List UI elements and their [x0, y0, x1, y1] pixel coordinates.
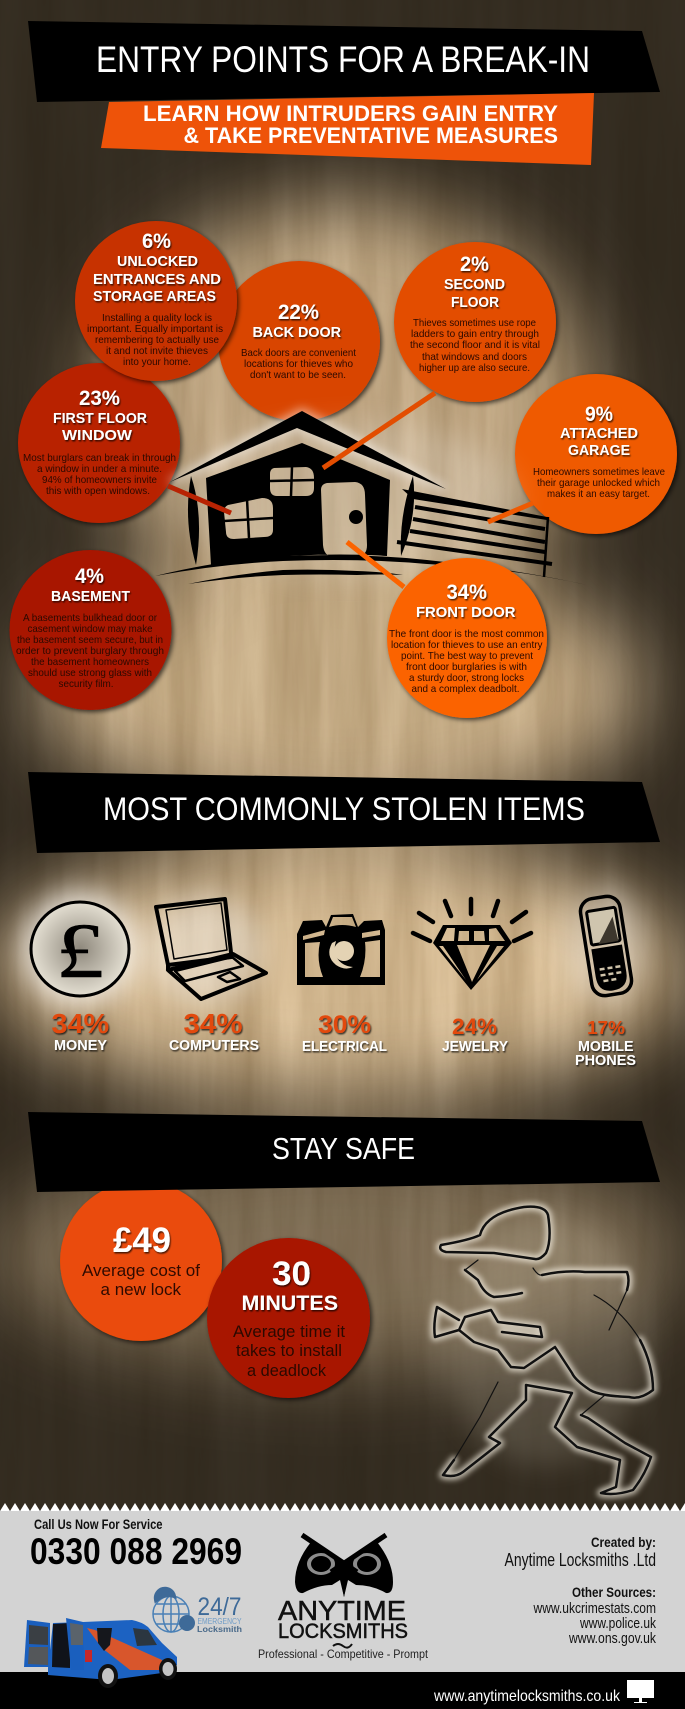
stat: electrical: 30% [318, 1011, 371, 1039]
section banner: most commonly stolen items [28, 772, 660, 853]
logo: 24/7 emergency locksmith: EMERGENCY [198, 1616, 242, 1626]
callout: attached garage: makes it an easy target. [547, 488, 650, 500]
callout: unlocked entrances and storage areas [75, 221, 237, 381]
callout: average lock cost [60, 1181, 222, 1341]
callout: unlocked entrances and storage areas: ENTRANCES AND [93, 271, 221, 288]
logo: anytime locksmiths [258, 1535, 429, 1661]
callout: basement [10, 550, 172, 710]
callout: second floor: SECOND [444, 276, 505, 293]
callout: unlocked entrances and storage areas: remembering to actually use [95, 334, 219, 346]
credits text: www.police.uk [579, 1615, 656, 1632]
callout: front door: location for thieves to use an entry [391, 639, 543, 651]
icon: pound coin: £ [56, 907, 104, 994]
callout: attached garage: Homeowners sometimes leave [533, 466, 665, 478]
stat: jewelry [442, 1014, 508, 1055]
stat: electrical: ELECTRICAL [302, 1039, 387, 1055]
callout: basement: the basement seem secure, but in [17, 634, 163, 646]
callout: deadlock install time [207, 1238, 370, 1398]
callout: second floor: 2% [460, 253, 489, 276]
callout: first floor window: Most burglars can break in through [23, 452, 176, 464]
callout: basement: security film. [58, 678, 114, 690]
callout: first floor window: 23% [79, 387, 120, 410]
callout: front door: 34% [446, 581, 487, 604]
section banner: stay safe: STAY SAFE [272, 1131, 415, 1166]
callout: attached garage: 9% [585, 403, 613, 426]
illustration: service van [24, 1618, 177, 1688]
stat: money: MONEY [54, 1038, 107, 1054]
call to action: phone number: 0330 088 2969 [30, 1531, 242, 1572]
callout: deadlock install time: Average time it [233, 1322, 345, 1341]
credits text: www.ukcrimestats.com [533, 1600, 656, 1617]
credits text: Created by: [591, 1534, 656, 1550]
callout: front door: a sturdy door, strong locks [409, 672, 524, 684]
stat: mobile phones: MOBILE [578, 1039, 634, 1055]
footer panel [0, 1503, 685, 1709]
callout: attached garage [515, 374, 677, 534]
callout: second floor: FLOOR [451, 294, 499, 311]
logo: 24/7 emergency locksmith [153, 1589, 242, 1634]
callout: back door: locations for thieves who [244, 358, 353, 370]
callout: front door: point. The best way to prevent [401, 650, 533, 662]
subtitle banner: & TAKE PREVENTATIVE MEASURES [184, 123, 558, 148]
callout: back door: don't want to be seen. [250, 369, 346, 381]
stat: mobile phones: PHONES [575, 1053, 636, 1069]
stat: computers [169, 1008, 259, 1054]
call to action: phone number [30, 1516, 242, 1572]
logo: anytime locksmiths: ANYTIME [278, 1595, 406, 1626]
stat: jewelry: 24% [452, 1014, 497, 1039]
callout: first floor window: WINDOW [62, 427, 133, 444]
callout: first floor window: FIRST FLOOR [53, 410, 147, 427]
stat: mobile phones [575, 1018, 636, 1069]
callout: back door [218, 261, 380, 421]
callout: back door: 22% [278, 301, 319, 324]
arrow: front door connector [347, 542, 404, 587]
icon: monitor [627, 1680, 654, 1703]
credits text: www.ons.gov.uk [568, 1630, 656, 1647]
callout: basement: casement window may make [28, 623, 153, 635]
callout: attached garage: GARAGE [568, 442, 630, 459]
logo: 24/7 emergency locksmith: 24/7 [198, 1593, 242, 1621]
website link: www.anytimelocksmiths.co.uk [433, 1688, 621, 1705]
callout: unlocked entrances and storage areas: into your home. [123, 356, 191, 368]
subtitle banner [101, 93, 594, 165]
subtitle banner: LEARN HOW INTRUDERS GAIN ENTRY [143, 101, 558, 126]
callout: unlocked entrances and storage areas: it and not invite thieves [106, 345, 208, 357]
icon: house [155, 411, 587, 585]
callout: first floor window: a window in under a minute. [37, 463, 162, 475]
icon: pound coin [22, 893, 138, 1005]
callout: basement: the basement homeowners [31, 656, 149, 668]
callout: basement: order to prevent burglary through [16, 645, 164, 657]
icon: diamond [413, 899, 531, 990]
callout: basement: A basements bulkhead door or [23, 612, 157, 624]
icon: laptop [147, 895, 266, 1005]
stat: computers: 34% [184, 1008, 243, 1039]
callout: first floor window: 94% of homeowners invite [42, 474, 157, 486]
callout: back door: Back doors are convenient [241, 347, 356, 359]
callout: second floor: ladders to gain entry through [411, 328, 539, 340]
callout: front door [387, 558, 547, 718]
logo: 24/7 emergency locksmith: Locksmith [197, 1624, 242, 1634]
title banner: ENTRY POINTS FOR A BREAK-IN [96, 39, 590, 80]
callout: average lock cost: Average cost of [82, 1261, 200, 1280]
icon: owl [295, 1535, 393, 1597]
call to action: phone number: Call Us Now For Service [34, 1516, 163, 1532]
credits text: Other Sources: [572, 1584, 656, 1600]
stat: electrical [302, 1011, 387, 1055]
callout: back door: BACK DOOR [252, 324, 341, 341]
callout: front door: front door burglaries is with [406, 661, 527, 673]
stat: computers: COMPUTERS [169, 1038, 259, 1054]
arrow: second floor connector [323, 393, 435, 468]
illustration: burglar outline [434, 1207, 653, 1494]
callout: basement: BASEMENT [51, 588, 130, 605]
icon: camera [297, 914, 385, 985]
title banner [28, 21, 660, 102]
callout: deadlock install time: a deadlock [247, 1361, 326, 1380]
callout: second floor: that windows and doors [422, 351, 527, 363]
callout: average lock cost: £49 [113, 1221, 171, 1260]
arrow: first floor window connector [168, 486, 231, 513]
callout: front door: The front door is the most common [389, 628, 544, 640]
stat: money: 34% [52, 1008, 109, 1039]
callout: front door: and a complex deadbolt. [412, 683, 520, 695]
callout: deadlock install time: 30 [272, 1255, 311, 1293]
callout: second floor: Thieves sometimes use rope [413, 317, 536, 329]
section banner: stay safe [28, 1112, 660, 1192]
callout: attached garage: their garage unlocked which [537, 477, 660, 489]
callout: basement: 4% [75, 565, 104, 588]
callout: second floor: the second floor and it is vital [410, 339, 540, 351]
logo: anytime locksmiths: Professional - Competitive - Prompt [258, 1647, 429, 1661]
callout: attached garage: ATTACHED [560, 425, 638, 442]
credits text [504, 1534, 656, 1647]
callout: front door: FRONT DOOR [416, 604, 516, 621]
logo: anytime locksmiths: LOCKSMITHS [278, 1620, 408, 1643]
callout: average lock cost: a new lock [100, 1280, 181, 1299]
callout: deadlock install time: takes to install [236, 1341, 342, 1360]
callout: unlocked entrances and storage areas: important. Equally important is [87, 323, 223, 335]
callout: deadlock install time: MINUTES [242, 1292, 338, 1315]
stat: money [52, 1008, 109, 1054]
callout: basement: should use strong glass with [28, 667, 152, 679]
section banner: most commonly stolen items: MOST COMMONLY STOLEN ITEMS [103, 791, 585, 827]
callout: unlocked entrances and storage areas: 6% [142, 230, 171, 253]
stat: jewelry: JEWELRY [442, 1039, 508, 1055]
callout: second floor: higher up are also secure. [419, 362, 530, 374]
callout: first floor window [18, 363, 180, 523]
arrow: garage connector [488, 503, 533, 522]
callout: unlocked entrances and storage areas: Installing a quality lock is [102, 312, 212, 324]
callout: first floor window: this with open windows. [46, 485, 150, 497]
callout: second floor [394, 242, 556, 402]
callout: unlocked entrances and storage areas: STORAGE AREAS [93, 288, 216, 305]
icon: mobile phone [566, 888, 646, 1004]
callout: unlocked entrances and storage areas: UNLOCKED [117, 253, 198, 270]
stat: mobile phones: 17% [587, 1018, 625, 1038]
